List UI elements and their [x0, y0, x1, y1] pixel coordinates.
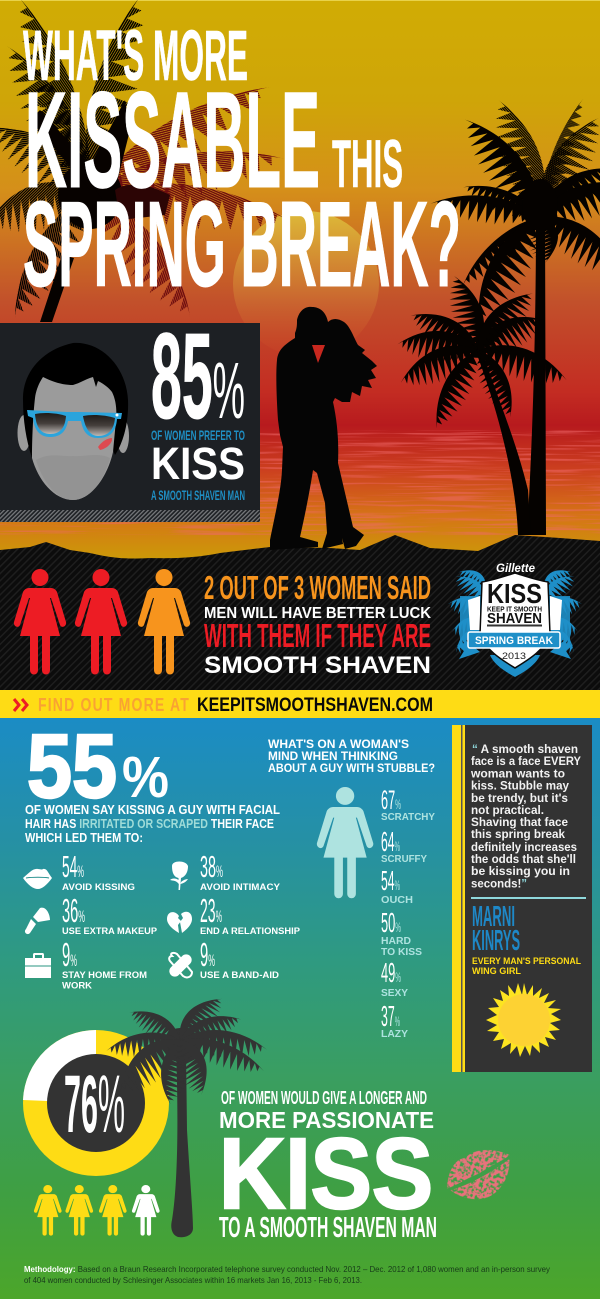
logo: Gillette Kiss badge: [446, 561, 584, 677]
quote text: the odds that she'll: [471, 852, 576, 866]
quote text: Shaving that face: [471, 815, 568, 829]
stat: scratchy: 67%: [381, 785, 401, 815]
stat: avoid kissing: AVOID KISSING: [62, 882, 135, 893]
quote text: woman wants to: [470, 766, 565, 780]
stat: 2 out of 3 women: [14, 569, 431, 679]
job title: [472, 956, 581, 977]
top highlight line: [0, 0, 600, 1]
name: [472, 901, 520, 957]
text: find out more at: FIND OUT MORE AT: [38, 695, 190, 715]
text: KISS: KISS: [487, 578, 542, 609]
text block: 76% longer kiss: KISS: [219, 1118, 433, 1230]
stat: avoid kissing: [23, 849, 135, 893]
icon: orange woman: [138, 569, 190, 674]
stat: stay home from work: [25, 936, 147, 992]
icon: man with sunglasses and kiss mark: [18, 343, 129, 500]
stat: 85%: 85%: [151, 308, 245, 444]
chart: 76% donut: [23, 1030, 169, 1176]
stat: avoid kissing: 54%: [62, 849, 84, 884]
stat: lazy: LAZY: [381, 1028, 408, 1040]
heading: MIND WHEN THINKING: [268, 751, 398, 763]
quote text: kiss. Stubble may: [471, 778, 569, 792]
text: methodology: of 404 women conducted by Schlesinger Associates within 16 markets Jan 16, 2013 - Feb 6, 2013.: [24, 1275, 362, 1285]
quote text: seconds!”: [471, 876, 527, 890]
panel: Marni Kinrys quote: KINRYS: [472, 925, 520, 957]
text: description: OF WOMEN SAY KISSING A GUY WITH FACIAL: [25, 803, 280, 817]
icon: lipstick kiss mark: [438, 1138, 522, 1212]
text: description: WHICH LED THEM TO:: [25, 831, 143, 845]
stat: use a band-aid: [167, 936, 279, 981]
text: men will have better luck: MEN WILL HAVE BETTER LUCK: [204, 605, 431, 622]
stat: use extra makeup: [25, 892, 158, 937]
stat: lazy: 37%: [381, 1001, 400, 1033]
sea ripples: [0, 430, 600, 535]
icon: red woman: [75, 569, 127, 674]
stat: stay home from work: STAY HOME FROM: [62, 970, 147, 981]
quote text: this spring break: [471, 827, 565, 841]
quote text: be kissing you in: [471, 864, 570, 878]
title: THIS: [332, 126, 403, 202]
right large palm tree: [429, 94, 600, 535]
quote text: [470, 742, 581, 890]
quote text: face is a face EVERY: [471, 754, 581, 768]
quote text: not practical.: [471, 803, 544, 817]
stat: end a relationship: END A RELATIONSHIP: [200, 926, 301, 937]
icon: double chevron: [14, 699, 27, 711]
stat: sexy: SEXY: [381, 987, 408, 999]
stat: ouch: OUCH: [381, 894, 413, 906]
stat: scratchy: SCRATCHY: [381, 811, 435, 823]
job title: EVERY MAN'S PERSONAL: [472, 956, 581, 967]
quote text: “ A smooth shaven: [472, 742, 578, 756]
text: 2 out of 3 women said: 2 OUT OF 3 WOMEN SAID: [204, 569, 431, 606]
stat: avoid intimacy: 38%: [200, 849, 223, 884]
setting sun: [233, 211, 379, 357]
text: of women prefer to: OF WOMEN PREFER TO: [151, 427, 245, 443]
heading: ABOUT A GUY WITH STUBBLE?: [268, 763, 435, 775]
stat: use a band-aid: 9%: [200, 936, 215, 973]
stat: scratchy: [381, 785, 435, 823]
stat: hard to kiss: 50%: [381, 907, 401, 938]
icon: rose: [170, 862, 188, 890]
stat: 76%: 76%: [64, 1059, 125, 1150]
icon: briefcase: [25, 953, 51, 978]
text: 2013: 2013: [502, 651, 526, 662]
title: [23, 17, 461, 312]
text: description: [25, 803, 280, 845]
text: a smooth shaven man: A SMOOTH SHAVEN MAN: [151, 487, 245, 503]
heading: [268, 739, 435, 775]
icon: broken heart: [167, 912, 192, 933]
job title: WING GIRL: [472, 966, 521, 977]
lower background: blue to green: [0, 718, 600, 1299]
text: website: KEEPITSMOOTHSHAVEN.COM: [197, 695, 433, 716]
text block: 76% longer kiss: [219, 1088, 437, 1244]
banner: spring break: [468, 632, 560, 648]
text: keep it smooth: KEEP IT SMOOTH: [487, 606, 542, 614]
logo: Gillette Kiss badge: SPRING BREAK: [475, 635, 553, 647]
icon: lips: [23, 869, 52, 889]
stat: ouch: 54%: [381, 865, 400, 896]
stat: hard to kiss: HARD: [381, 935, 411, 947]
stat: 55% facial hair: [25, 717, 280, 845]
stat: scruffy: [381, 826, 427, 865]
text: smooth shaven: SMOOTH SHAVEN: [204, 652, 431, 679]
stat: avoid intimacy: [170, 849, 281, 893]
stat: 55% facial hair: %: [122, 745, 169, 810]
left palm tree: [0, 0, 291, 326]
bar: find out more: [0, 690, 600, 718]
text: methodology: [24, 1264, 551, 1285]
stat: scruffy: SCRUFFY: [381, 853, 427, 865]
stat: hard to kiss: TO KISS: [381, 946, 422, 958]
heading: WHAT'S ON A WOMAN'S: [268, 739, 409, 751]
title: WHAT'S MORE: [23, 17, 248, 96]
stat: stay home from work: 9%: [62, 936, 77, 973]
kissing couple silhouette: [270, 307, 377, 550]
name: MARNI: [472, 901, 515, 933]
women row: 3 of 4: [34, 1185, 160, 1236]
icon: makeup brush: [25, 908, 50, 934]
panel: 85% of women: [0, 308, 260, 522]
text block: 76% longer kiss: MORE PASSIONATE: [219, 1107, 434, 1133]
right small palm tree: [395, 272, 571, 535]
text: with them if they are: WITH THEM IF THEY ARE: [204, 617, 431, 654]
stat: end a relationship: 23%: [200, 892, 222, 929]
icon: bandage: [167, 952, 194, 979]
stat: use a band-aid: USE A BAND-AID: [200, 970, 279, 981]
text: SHAVEN: SHAVEN: [487, 610, 542, 627]
text: description: HAIR HAS IRRITATED OR SCRAPED THEIR FACE: [25, 817, 274, 831]
stat: end a relationship: [167, 892, 301, 937]
text block: 76% longer kiss: OF WOMEN WOULD GIVE A LONGER AND: [221, 1088, 427, 1108]
text: kiss: KISS: [151, 438, 245, 489]
text: methodology: Methodology: Based on a Braun Research Incorporated telephone survey conducted Nov. 2012 – Dec. 2012 of 1,080 women and an in-person survey: [24, 1264, 551, 1274]
chart: what's on a woman's mind: [268, 739, 435, 1040]
quote text: definitely increases: [471, 840, 577, 854]
stat: 55% facial hair: 55: [27, 717, 117, 817]
stat: sexy: [381, 957, 408, 999]
quote text: be trendy, but it's: [471, 791, 568, 805]
text: Gillette: Gillette: [496, 561, 535, 575]
icon: sun: [486, 983, 561, 1057]
stat: use extra makeup: 36%: [62, 892, 85, 929]
stat: stay home from work: WORK: [62, 980, 92, 992]
icon: red woman: [14, 569, 66, 674]
stat: hard to kiss: [381, 907, 422, 958]
stat: scruffy: 64%: [381, 826, 400, 857]
stat: use extra makeup: USE EXTRA MAKEUP: [62, 926, 158, 937]
panel: Marni Kinrys quote: [452, 725, 592, 1072]
palm tree: dark grey: [106, 987, 268, 1237]
stat: avoid intimacy: AVOID INTIMACY: [200, 882, 281, 893]
stat: sexy: 49%: [381, 957, 401, 988]
icon: pale woman: [317, 787, 373, 898]
background: sunset sky and sea: [0, 0, 600, 570]
band: black strip with ridge: [0, 535, 600, 690]
